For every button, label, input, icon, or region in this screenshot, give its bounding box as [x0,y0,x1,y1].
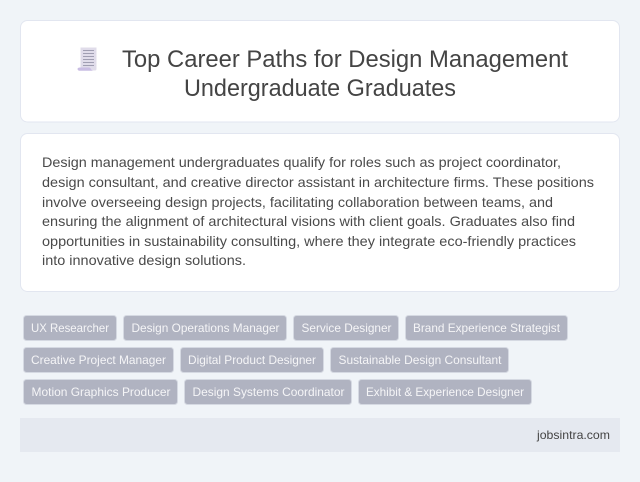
tag [24,348,174,372]
tag: Service Designer [302,321,392,335]
title: Top Career Paths for Design Management [122,46,568,73]
footer [20,418,620,452]
tag [180,348,324,372]
footer: jobsintra.com [536,428,610,442]
tag [330,348,508,372]
tag [124,316,286,340]
icon: document scroll [78,48,96,71]
tag: Brand Experience Strategist [413,321,561,335]
tag [406,316,568,340]
tag [358,380,532,404]
tag: Sustainable Design Consultant [338,353,502,367]
tag: Design Systems Coordinator [192,385,344,399]
text block: description: design consultant, and creative director assistant in architecture firms. These positions [42,174,594,190]
tag [24,316,116,340]
text block: description: into innovative design solutions. [42,252,246,268]
tag: Motion Graphics Producer [32,385,170,399]
tag: Design Operations Manager [132,321,280,335]
panel: description [20,134,620,292]
text block: description: Design management undergraduates qualify for roles such as project coordinator, [42,154,561,170]
text block: description: opportunities in sustainability consulting, where they integrate eco-friendly practices [42,233,576,249]
panel: title card [20,20,620,122]
tags: career paths [24,316,568,404]
text block: description: ensuring the alignment of architectural visions with client goals. Graduates also find [42,213,575,229]
tag [294,316,398,340]
tag: UX Researcher [31,321,109,335]
title: Undergraduate Graduates [184,75,456,102]
tag: Digital Product Designer [188,353,316,367]
text block: description [42,154,594,268]
tag: Exhibit & Experience Designer [366,385,524,399]
tag [24,380,178,404]
tag: Creative Project Manager [31,353,166,367]
text block: description: involve overseeing design projects, facilitating collaboration between teams, and [42,194,553,210]
tag [184,380,352,404]
title [122,46,568,102]
